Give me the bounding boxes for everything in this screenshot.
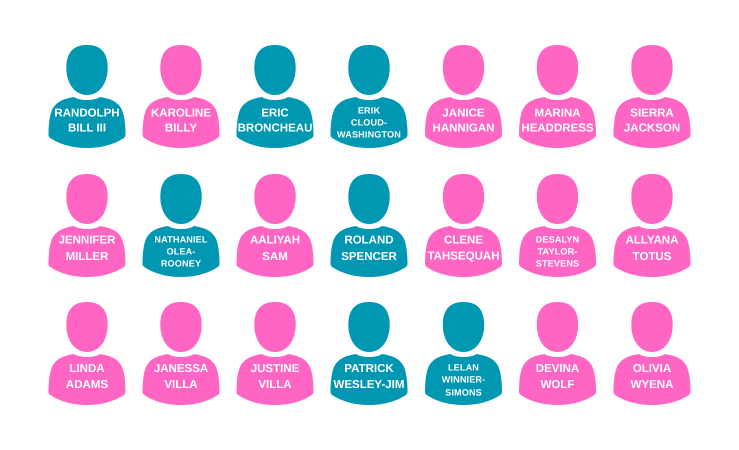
person: Devina Wolf: DEVINA xyxy=(536,363,579,375)
person: Justine Villa xyxy=(236,302,314,405)
person: Patrick Wesley-Jim: PATRICK xyxy=(344,363,394,375)
person: Marina Headdress: HEADDRESS xyxy=(521,122,594,134)
person: Clene Tahsequah: TAHSEQUAH xyxy=(428,250,499,262)
person: Marina Headdress xyxy=(519,45,596,148)
person: Desalyn Taylor-Stevens: STEVENS xyxy=(536,258,579,268)
person: Eric Broncheau: BRONCHEAU xyxy=(238,122,312,134)
person: Eric Broncheau xyxy=(236,45,314,148)
person: Patrick Wesley-Jim: WESLEY-JIM xyxy=(334,379,404,391)
person: Nathaniel Olea-Rooney: OLEA- xyxy=(166,246,196,256)
person: Jennifer Miller: JENNIFER xyxy=(59,234,116,246)
person: Nathaniel Olea-Rooney: ROONEY xyxy=(161,258,201,268)
person: Justine Villa: JUSTINE xyxy=(251,363,300,375)
person: Janessa Villa: VILLA xyxy=(164,379,198,391)
person: Patrick Wesley-Jim xyxy=(330,302,408,405)
person: Erik Cloud-Washington: CLOUD- xyxy=(351,118,387,128)
person: Linda Adams: LINDA xyxy=(69,363,105,375)
person: Karoline Billy: KAROLINE xyxy=(151,108,211,120)
person: Desalyn Taylor-Stevens: TAYLOR- xyxy=(538,246,577,256)
person: Lelan Winnier-Simons: SIMONS xyxy=(445,388,482,398)
person: Allyana Totus: ALLYANA xyxy=(626,234,678,246)
person: Olivia Wyena: OLIVIA xyxy=(633,363,671,375)
person: Karoline Billy: BILLY xyxy=(165,122,197,134)
person: Olivia Wyena: WYENA xyxy=(631,379,673,391)
person: Randolph Bill III xyxy=(48,45,126,148)
person: Roland Spencer: ROLAND xyxy=(344,234,394,246)
person: Janice Hannigan xyxy=(425,45,502,148)
person: Clene Tahsequah xyxy=(425,174,502,277)
person: Aaliyah Sam: SAM xyxy=(262,251,288,263)
person: Janice Hannigan: JANICE xyxy=(442,108,485,120)
person: Jennifer Miller: MILLER xyxy=(66,251,109,263)
person: Marina Headdress: MARINA xyxy=(534,108,580,120)
person: Nathaniel Olea-Rooney: NATHANIEL xyxy=(154,234,208,244)
person: Randolph Bill III: RANDOLPH xyxy=(54,108,120,120)
person: Roland Spencer xyxy=(330,174,408,277)
person: Lelan Winnier-Simons: LELAN xyxy=(448,362,479,372)
person: Erik Cloud-Washington: ERIK xyxy=(358,106,380,116)
person: Nathaniel Olea-Rooney xyxy=(142,174,220,277)
person: Lelan Winnier-Simons: WINNIER- xyxy=(442,374,485,384)
person: Olivia Wyena xyxy=(614,302,690,405)
person: Roland Spencer: SPENCER xyxy=(341,251,397,263)
person: Sierra Jackson: SIERRA xyxy=(630,108,674,120)
person: Karoline Billy xyxy=(142,45,220,148)
person: Janessa Villa: JANESSA xyxy=(154,363,208,375)
person: Janessa Villa xyxy=(142,302,220,405)
person: Lelan Winnier-Simons xyxy=(425,302,502,405)
person: Allyana Totus: TOTUS xyxy=(633,251,672,263)
person: Aaliyah Sam xyxy=(236,174,314,277)
person: Eric Broncheau: ERIC xyxy=(261,108,289,120)
person: Devina Wolf xyxy=(519,302,596,405)
person: Clene Tahsequah: CLENE xyxy=(444,234,483,246)
person: Randolph Bill III: BILL III xyxy=(68,122,106,134)
person: Aaliyah Sam: AALIYAH xyxy=(250,234,300,246)
person: Allyana Totus xyxy=(614,174,690,277)
person: Erik Cloud-Washington: WASHINGTON xyxy=(337,130,401,140)
person: Linda Adams: ADAMS xyxy=(66,379,108,391)
person: Jennifer Miller xyxy=(48,174,126,277)
person: Justine Villa: VILLA xyxy=(258,379,292,391)
person: Desalyn Taylor-Stevens xyxy=(519,174,596,277)
person: Devina Wolf: WOLF xyxy=(541,379,574,391)
person: Erik Cloud-Washington xyxy=(330,45,408,148)
person: Desalyn Taylor-Stevens: DESALYN xyxy=(536,234,579,244)
person: Linda Adams xyxy=(48,302,126,405)
person: Sierra Jackson: JACKSON xyxy=(624,122,680,134)
person: Janice Hannigan: HANNIGAN xyxy=(433,122,494,134)
person: Sierra Jackson xyxy=(614,45,690,148)
